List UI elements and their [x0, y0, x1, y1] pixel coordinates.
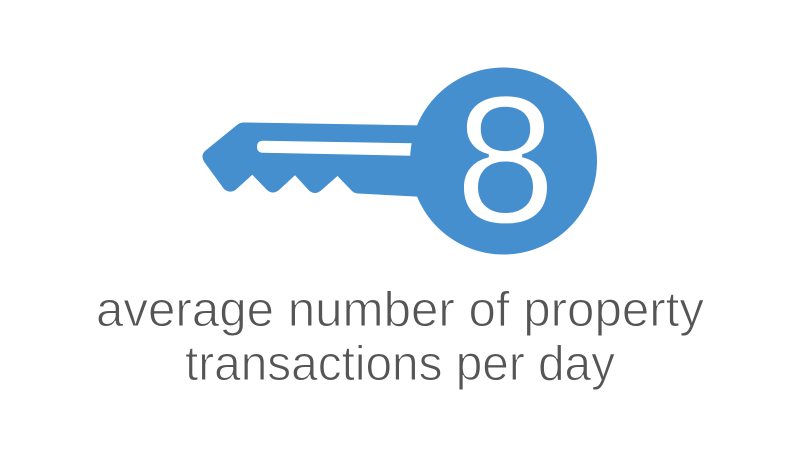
key slot: [257, 141, 412, 156]
caption line 2: transactions per day: [185, 337, 615, 391]
caption line 1: average number of property: [96, 283, 704, 337]
key head circle: [410, 68, 597, 254]
key blade: [202, 122, 425, 197]
caption: [96, 283, 704, 391]
icon: key: [202, 62, 597, 264]
number 8: 8: [451, 62, 560, 264]
